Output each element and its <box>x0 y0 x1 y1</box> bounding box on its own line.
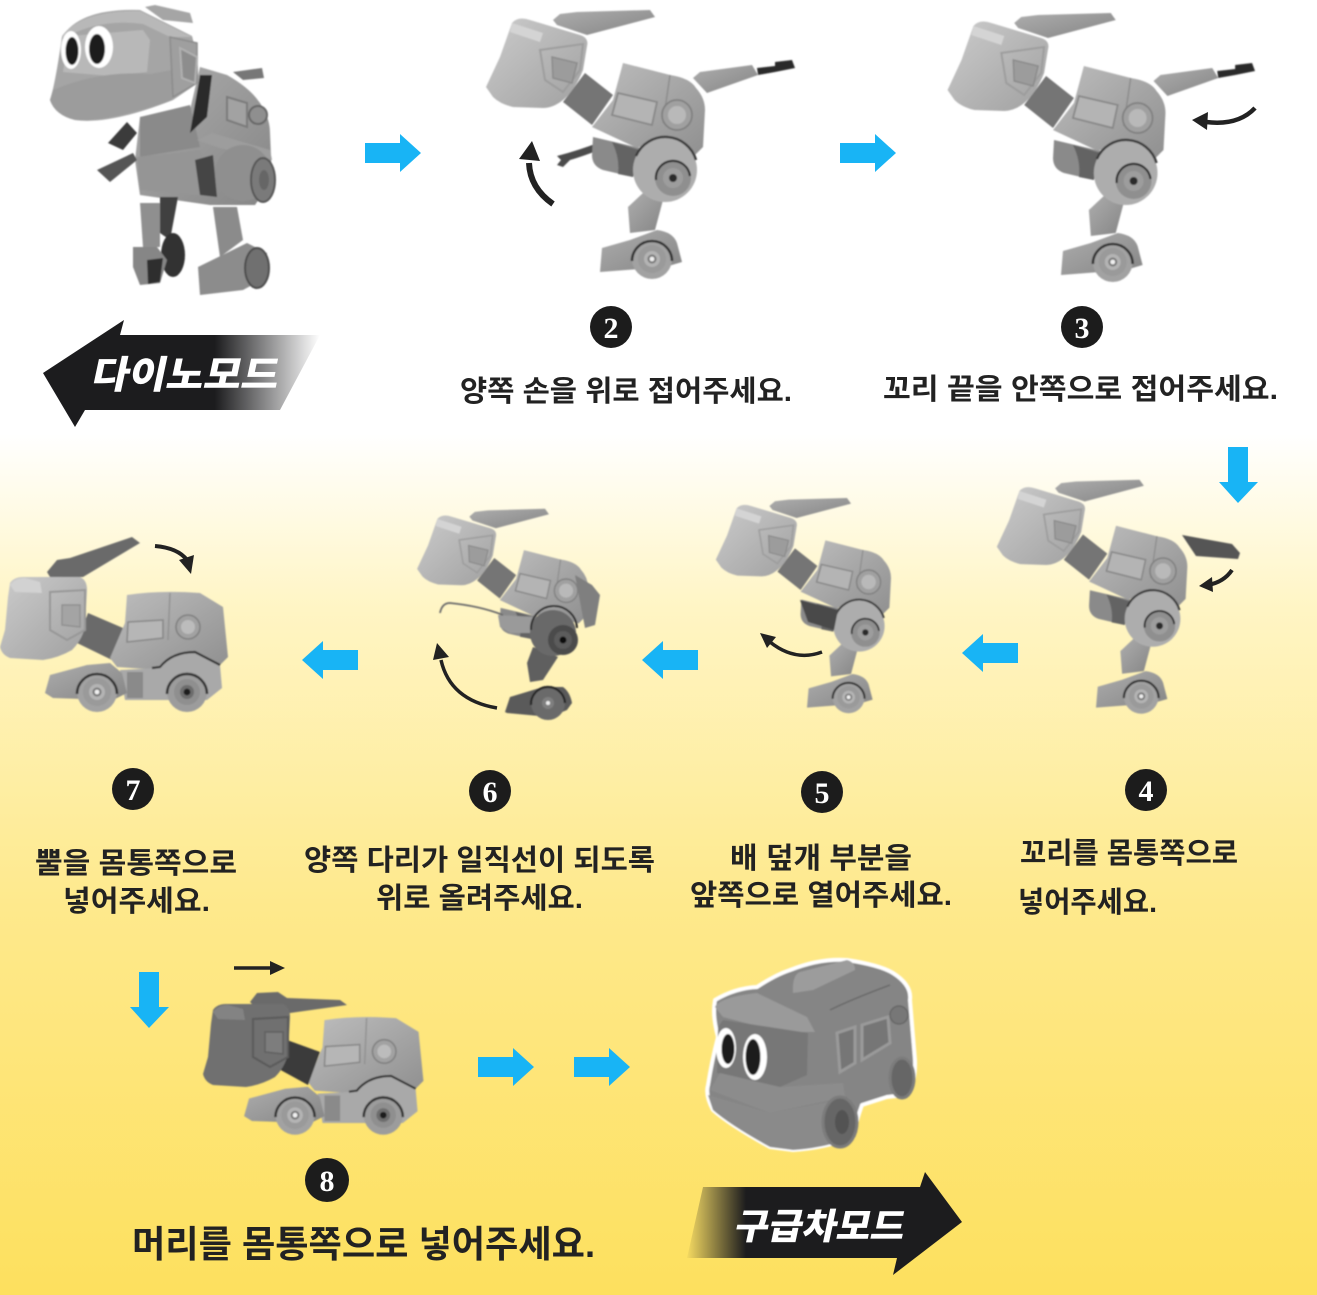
robot: step 7 <box>0 537 228 712</box>
caption: step 2: 양쪽 손을 위로 접어주세요. <box>460 375 792 408</box>
robot: step 8 <box>203 992 423 1135</box>
number badge 8: 8 <box>320 1165 334 1198</box>
arrow: to step 5 left <box>642 641 698 679</box>
number badge 3: 3 <box>1074 312 1090 345</box>
arrow: right 1 <box>478 1048 534 1086</box>
number badge 3 <box>1061 306 1103 348</box>
robot: step 5 <box>716 498 891 713</box>
number badge 5 <box>801 771 843 813</box>
curved arrow: step 7 <box>155 546 194 574</box>
caption: step 7: 넣어주세요. <box>63 885 210 918</box>
curved arrow: step 2 <box>519 141 553 204</box>
caption: step 6 <box>304 844 655 915</box>
robot: dino mode <box>50 5 275 295</box>
robot: ambulance mode <box>707 960 915 1150</box>
arrow: to step 2 <box>365 134 421 172</box>
caption: step 8: 머리를 몸통쪽으로 넣어주세요. <box>132 1224 595 1265</box>
number badge 4: 4 <box>1138 775 1154 808</box>
straight arrow: step 8 <box>234 961 285 975</box>
caption: step 5 <box>690 842 952 912</box>
arrow: to step 6 left <box>302 641 358 679</box>
curved arrow: step 6 <box>433 643 497 708</box>
caption: step 6: 위로 올려주세요. <box>376 882 583 915</box>
curved arrow: step 5 <box>760 633 822 655</box>
robot: step 6 <box>417 509 600 720</box>
arrow: down to step 8 <box>130 972 169 1028</box>
caption: step 5: 배 덮개 부분을 <box>730 842 912 875</box>
number badge 6 <box>469 770 511 812</box>
caption: step 4: 넣어주세요. <box>1018 886 1157 919</box>
number badge 7 <box>112 768 154 810</box>
curved arrow: step 3 <box>1192 108 1255 130</box>
arrow: to step 3 <box>840 134 896 172</box>
number badge 2: 2 <box>604 312 618 345</box>
robot: step 3 <box>948 13 1255 282</box>
arrow: to step 4 left <box>962 634 1018 672</box>
number badge 4 <box>1125 769 1167 811</box>
robot: step 2 <box>486 10 795 279</box>
caption: step 7 <box>35 848 237 918</box>
number badge 7: 7 <box>126 774 140 807</box>
caption: step 6: 양쪽 다리가 일직선이 되도록 <box>304 844 655 877</box>
number badge 5: 5 <box>814 777 830 810</box>
arrow: down to step 4 <box>1219 447 1258 503</box>
caption: step 3: 꼬리 끝을 안쪽으로 접어주세요. <box>883 373 1278 406</box>
banner: ambulance mode <box>687 1172 962 1275</box>
curved arrow: step 4 <box>1199 570 1232 592</box>
caption: step 5: 앞쪽으로 열어주세요. <box>690 879 952 912</box>
number badge 8 <box>305 1158 349 1202</box>
robot: step 4 <box>997 480 1240 714</box>
banner: dino mode <box>43 320 320 427</box>
banner: ambulance mode: 구급차모드 <box>731 1206 910 1247</box>
number badge 2 <box>590 306 632 348</box>
caption: step 4 <box>1018 837 1238 919</box>
caption: step 7: 뿔을 몸통쪽으로 <box>35 848 237 880</box>
banner: dino mode: 다이노모드 <box>88 354 284 397</box>
caption: step 4: 꼬리를 몸통쪽으로 <box>1020 837 1238 870</box>
arrow: right 2 <box>574 1048 630 1086</box>
number badge 6: 6 <box>482 776 498 809</box>
